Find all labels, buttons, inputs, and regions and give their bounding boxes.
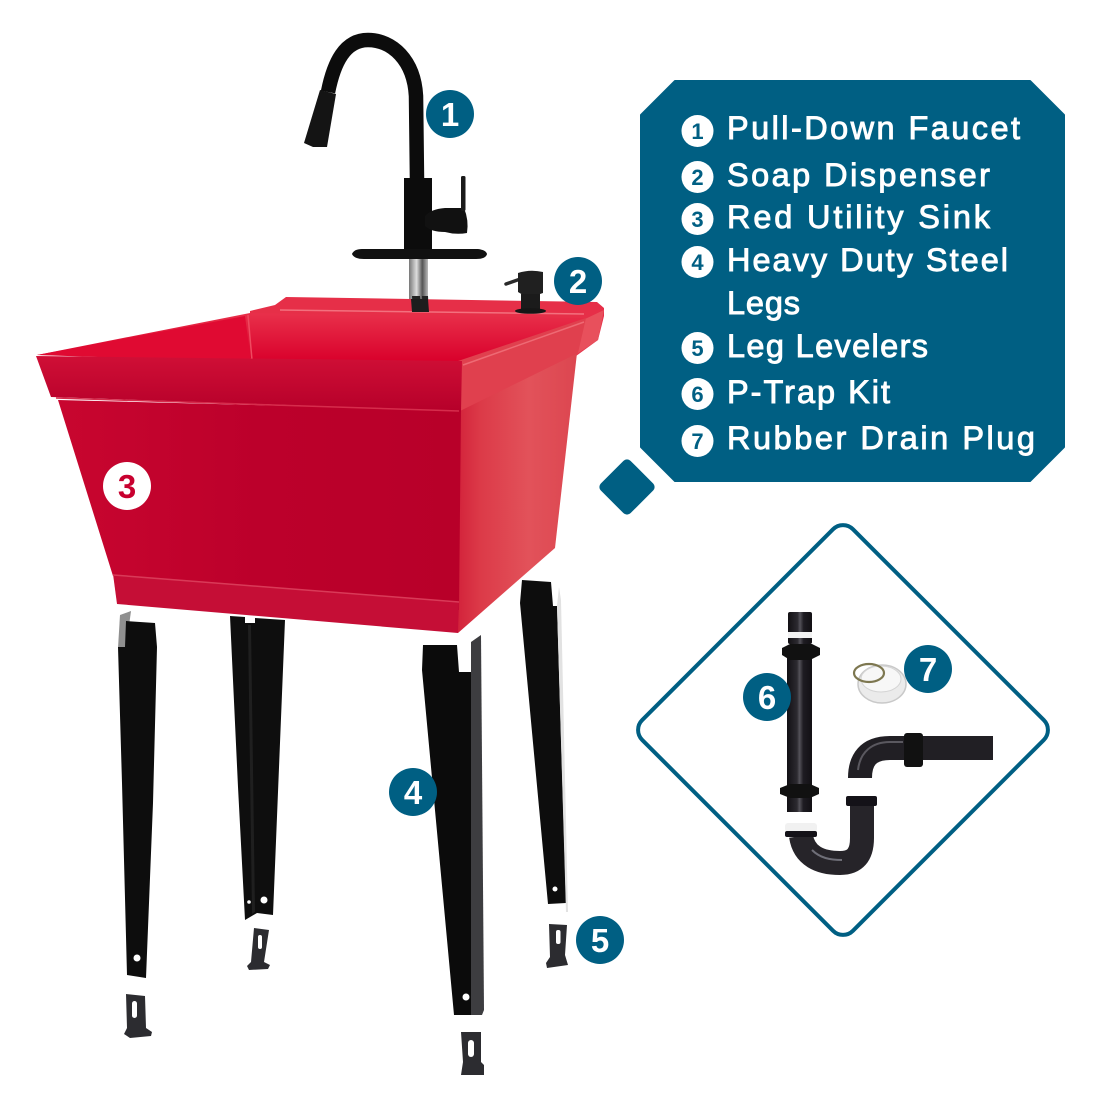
elbow tube <box>860 748 993 778</box>
small diamond accent <box>597 457 657 517</box>
leg D edge <box>557 587 568 912</box>
item 6: P-Trap Kit <box>727 374 890 410</box>
deck plate <box>352 249 487 259</box>
faucet hose in drain hole <box>411 299 429 312</box>
tailpiece pipe <box>788 612 812 644</box>
faucet handle <box>425 208 468 234</box>
dispenser neck <box>521 294 540 310</box>
item 3: Red Utility Sink <box>727 199 991 235</box>
leg A <box>118 621 157 978</box>
white washer <box>788 632 812 638</box>
right body wall <box>456 353 577 633</box>
item 4 <box>682 242 1008 321</box>
bottom band line <box>113 575 459 602</box>
faucet hose shank <box>409 259 428 299</box>
leveler A <box>124 994 152 1038</box>
faucet hoses <box>412 296 429 314</box>
trap cup <box>846 796 877 806</box>
deck right end <box>577 310 604 354</box>
diamond frame <box>632 519 1054 941</box>
leg D hole <box>552 886 558 892</box>
item 2: 2 <box>691 165 704 190</box>
spray head <box>304 90 336 147</box>
leg B crease <box>248 625 255 914</box>
plug top ridge <box>861 666 901 692</box>
leg B <box>230 616 285 920</box>
leg A hole <box>134 954 140 962</box>
soap dispenser <box>506 271 546 314</box>
leg C <box>422 645 472 1015</box>
rim shadow line <box>56 398 459 411</box>
right rim highlight <box>463 322 584 365</box>
interior back wall <box>250 314 582 362</box>
leg A tab <box>118 611 131 648</box>
item 7: Rubber Drain Plug <box>727 420 1035 456</box>
item 1: 1 <box>691 119 704 144</box>
item 1: Pull-Down Faucet <box>727 110 1020 146</box>
lower nut <box>780 784 819 798</box>
item 3: 3 <box>691 207 704 232</box>
leg B holes <box>260 896 268 904</box>
right side rim <box>458 318 586 412</box>
dispenser lever <box>506 277 526 284</box>
faucet lever <box>461 176 466 211</box>
badge 2 <box>554 257 602 305</box>
plug ring <box>854 664 884 682</box>
rear deck <box>250 297 604 356</box>
badge 5: 5 <box>591 922 609 959</box>
leveler B <box>247 928 270 970</box>
u-bend highlight <box>812 850 842 860</box>
plug body <box>858 665 906 703</box>
badge 3: 3 <box>118 468 136 505</box>
front body <box>58 400 461 610</box>
faucet body <box>404 178 432 252</box>
interior left wall <box>37 316 251 362</box>
item 7: 7 <box>691 429 704 454</box>
rubber drain plug <box>854 664 906 703</box>
callout panel: parts list <box>641 81 1064 481</box>
red utility sink <box>36 297 604 633</box>
badge 6: 6 <box>758 679 776 716</box>
badge 7 <box>904 645 952 693</box>
item 5: 5 <box>691 336 704 361</box>
bottom band <box>113 574 459 633</box>
leg D <box>520 580 566 904</box>
front rim <box>36 356 462 411</box>
leveler D <box>546 924 568 968</box>
badge 1 <box>426 90 474 138</box>
interior corner crease <box>248 315 252 360</box>
item 5: Leg Levelers <box>727 328 928 364</box>
leg C hole <box>462 994 470 1000</box>
leg B small hole <box>247 900 251 904</box>
sink basin interior <box>37 313 585 362</box>
item 4: 4 <box>691 250 704 275</box>
p-trap kit <box>780 612 993 863</box>
leveler C <box>461 1032 484 1075</box>
trap collar <box>785 831 817 837</box>
panel background <box>641 81 1064 481</box>
badge 5 <box>576 916 624 964</box>
item 2: Soap Dispenser <box>727 157 990 193</box>
tailpiece tube <box>787 650 812 812</box>
legs <box>118 580 568 1015</box>
item 4: Legs <box>727 285 800 321</box>
dispenser head <box>518 271 543 295</box>
elbow highlight <box>858 742 903 770</box>
badge 6 <box>743 673 791 721</box>
badge 3 <box>103 462 151 510</box>
badge 2: 2 <box>569 263 587 300</box>
leg levelers <box>124 924 568 1075</box>
u-bend <box>801 806 862 863</box>
badge 1: 1 <box>441 96 459 133</box>
faucet <box>304 40 487 314</box>
leg C side <box>471 635 484 1015</box>
badge 4 <box>389 768 437 816</box>
badge 7: 7 <box>919 651 937 688</box>
trap white washer <box>785 823 817 832</box>
elbow nut <box>904 733 923 767</box>
item 6: 6 <box>691 382 704 407</box>
badge 4: 4 <box>404 774 423 811</box>
dispenser base <box>515 308 546 314</box>
gooseneck spout <box>328 40 417 180</box>
deck highlight line <box>280 310 584 314</box>
item 4: Heavy Duty Steel <box>727 242 1008 278</box>
upper nut <box>782 644 820 660</box>
